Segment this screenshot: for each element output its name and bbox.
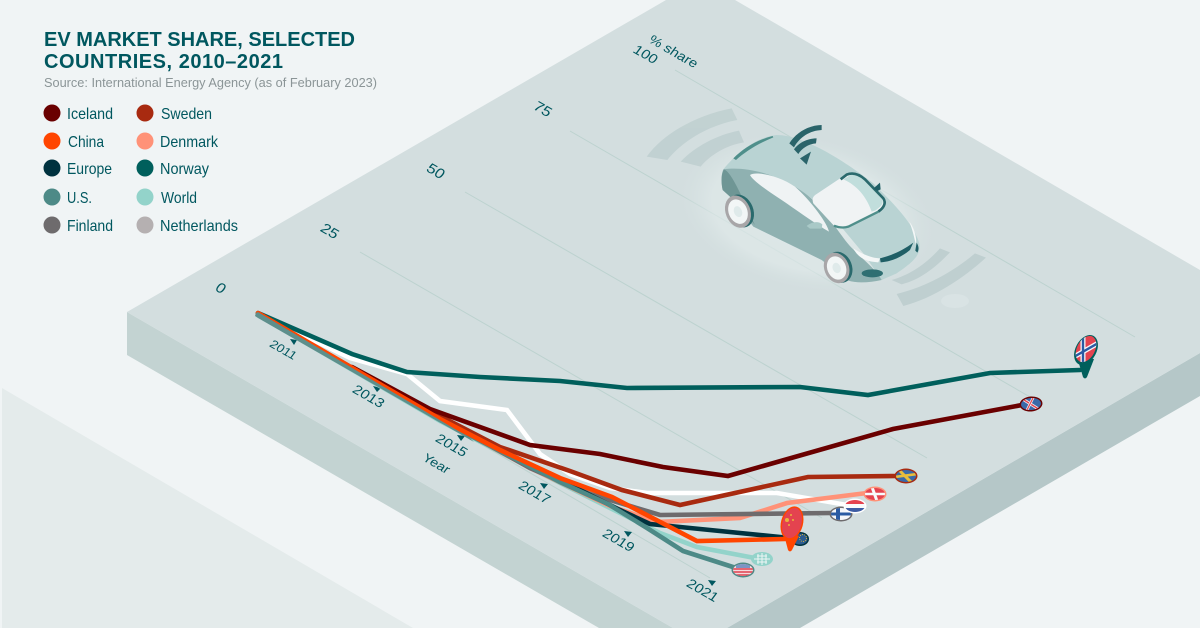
x axis year labels: 2017 [515, 479, 553, 507]
title [44, 29, 355, 73]
headlights and grille [853, 222, 919, 277]
line: Europe [258, 314, 790, 538]
platform left side [127, 312, 673, 628]
lower-left floor plane [2, 388, 413, 628]
marker: Iceland [1020, 396, 1042, 412]
marker: Norway [1074, 335, 1098, 378]
legend: Netherlands [160, 218, 238, 235]
legend: Finland [67, 218, 113, 235]
rear wheel [720, 190, 759, 232]
legend: Iceland [67, 106, 113, 123]
rear spoiler [733, 136, 773, 160]
legend: Europe [67, 161, 112, 178]
x axis year labels: 2011 [267, 338, 299, 362]
line: China [258, 313, 785, 541]
side window [750, 173, 829, 232]
roof fin [873, 183, 881, 191]
y axis labels [212, 32, 702, 297]
x axis year labels: 2015 [432, 432, 470, 460]
legend: World [161, 190, 197, 207]
line: Iceland [352, 367, 1022, 476]
x axis year labels: 2019 [599, 527, 637, 555]
y axis labels: 100 [630, 43, 661, 67]
title: COUNTRIES, 2010–2021 [44, 51, 283, 73]
legend: Denmark [160, 134, 219, 151]
x axis year labels: 2013 [349, 383, 387, 411]
line: U.S. [258, 314, 736, 568]
legend [44, 104, 238, 235]
x axis year labels [267, 338, 721, 605]
y axis labels: 0 [212, 280, 229, 297]
windshield [813, 173, 885, 228]
line chart [255, 312, 1080, 568]
line: shared start of the bundle [255, 312, 474, 442]
car body top [723, 135, 920, 280]
marker: Denmark [864, 486, 886, 502]
wing mirror [807, 222, 822, 229]
marker: Netherlands [844, 498, 866, 514]
y axis labels: 75 [530, 99, 555, 120]
line: World [258, 315, 760, 559]
marker: World [751, 552, 773, 566]
car body side [722, 169, 882, 282]
line: Finland [258, 314, 832, 515]
car rear shade [722, 169, 755, 225]
car with wireless signal [647, 108, 986, 318]
wifi icon [789, 125, 822, 165]
legend: U.S. [67, 190, 92, 207]
source note: Source: International Energy Agency (as of February 2023) [44, 75, 377, 90]
line: Sweden [380, 384, 897, 505]
signal arcs front [892, 248, 986, 306]
line: Norway [258, 313, 1080, 395]
marker: U.S. [732, 562, 754, 578]
title: EV MARKET SHARE, SELECTED [44, 29, 355, 51]
y axis labels: 25 [317, 221, 342, 242]
legend: China [68, 134, 104, 151]
legend: Norway [160, 161, 209, 178]
marker: Sweden [894, 468, 918, 484]
y axis labels: % share [646, 32, 702, 71]
glow around car [660, 109, 953, 318]
marker: Finland [830, 506, 852, 522]
x axis year labels: 2021 [683, 577, 721, 605]
floor sheen [941, 294, 969, 308]
marker: Europe [791, 532, 809, 546]
legend: Sweden [161, 106, 212, 123]
marker: China [780, 506, 804, 552]
platform right side [727, 353, 1200, 628]
line: Netherlands [258, 313, 847, 505]
line: Denmark [258, 314, 867, 522]
front wheel [819, 248, 857, 287]
y axis labels: 50 [423, 161, 448, 182]
signal arcs rear [647, 108, 744, 167]
x axis year labels: Year [420, 451, 454, 477]
